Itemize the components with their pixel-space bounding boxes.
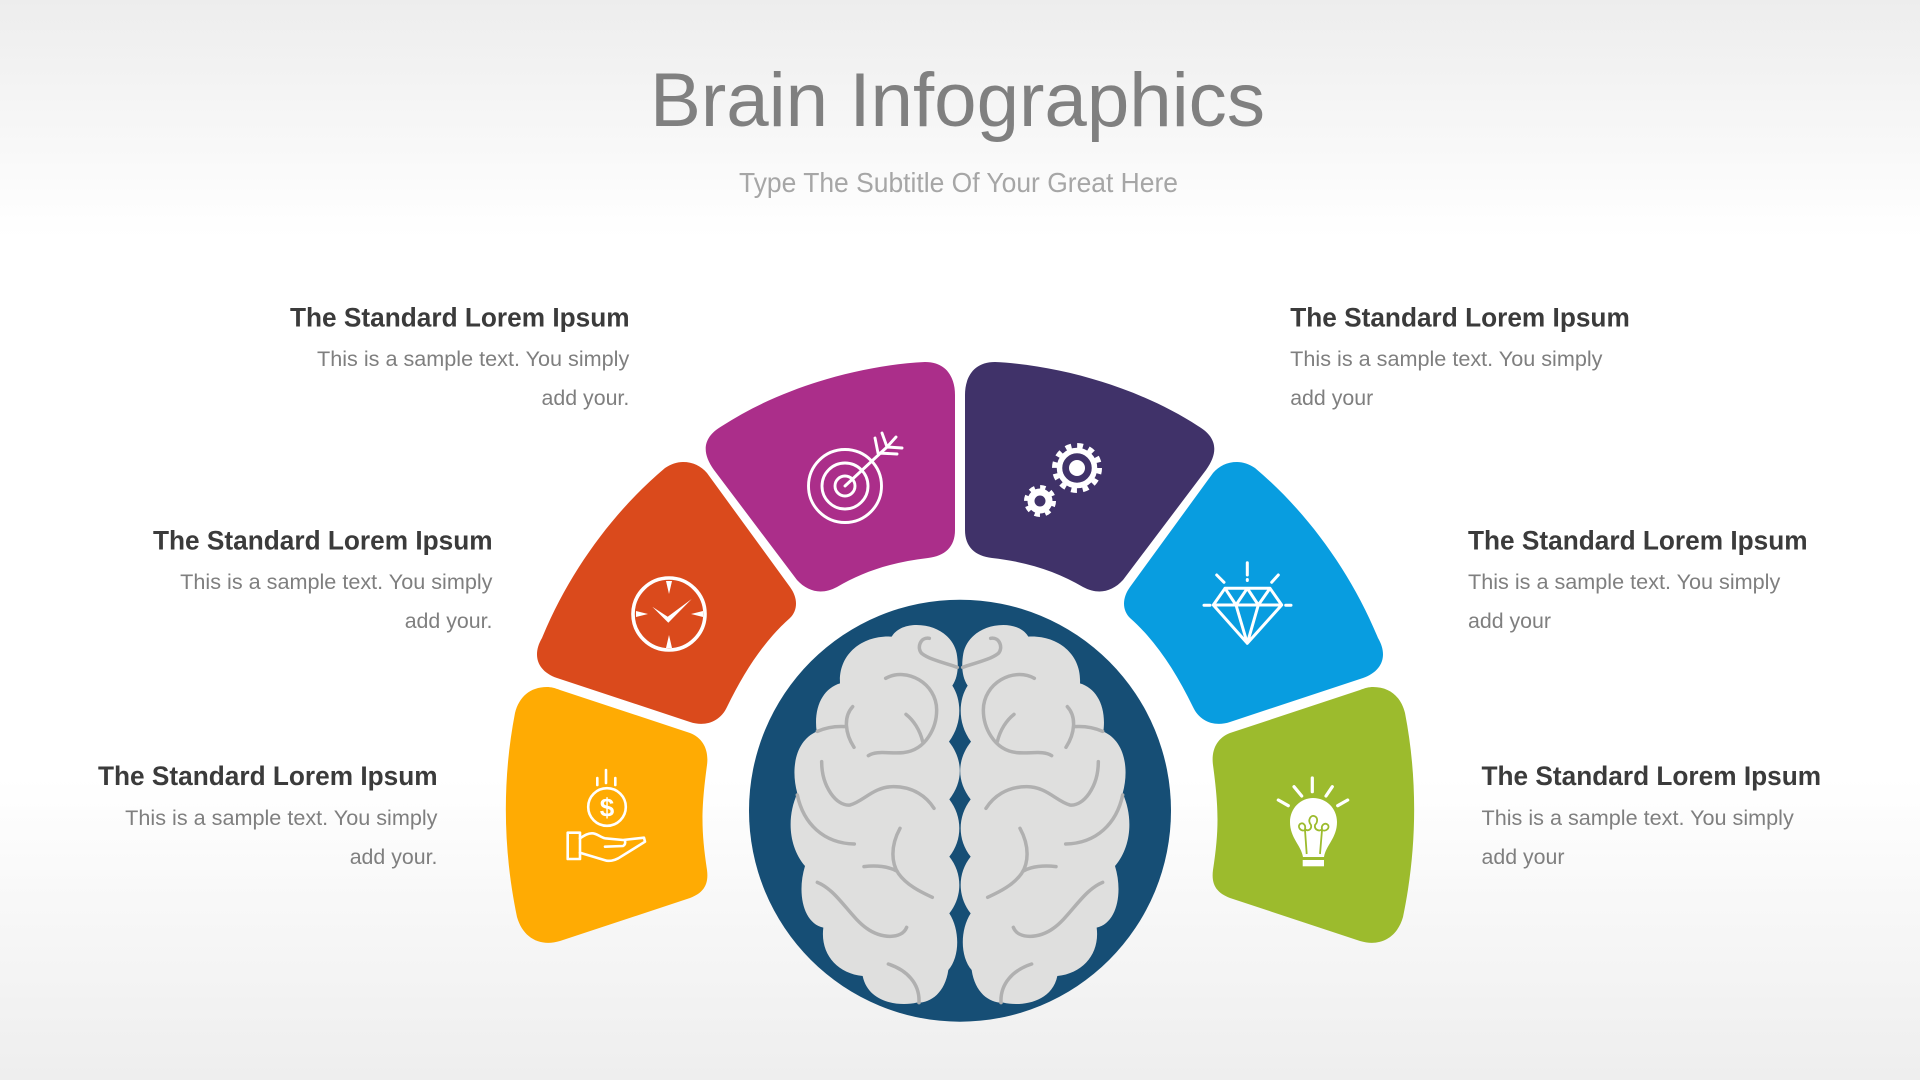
text block: top right: The Standard Lorem Ipsum — [1290, 303, 1630, 333]
title: Brain Infographics — [650, 58, 1265, 143]
panel: purple segment — [965, 362, 1214, 591]
text block: top left: This is a sample text. You simply — [317, 347, 630, 371]
text block: middle left: The Standard Lorem Ipsum — [153, 526, 493, 556]
text block: middle right: add your — [1468, 609, 1551, 633]
icon: gears — [1026, 446, 1100, 515]
text block: middle left — [153, 526, 493, 633]
text block: bottom right: The Standard Lorem Ipsum — [1482, 761, 1821, 791]
panel: green segment — [1213, 687, 1414, 943]
brain circle background — [749, 600, 1171, 1022]
text block: top left: The Standard Lorem Ipsum — [290, 303, 630, 333]
panel: magenta segment — [706, 362, 955, 591]
text block: middle left: add your. — [405, 609, 492, 633]
text block: bottom left: add your. — [350, 845, 438, 869]
text block: top right — [1290, 303, 1630, 410]
brain: left hemisphere — [791, 625, 960, 1004]
icon: coin and hand — [568, 770, 645, 861]
icon: clock — [633, 578, 705, 650]
icon: diamond — [1204, 563, 1291, 643]
brain: right hemisphere — [960, 625, 1129, 1004]
text block: bottom left: The Standard Lorem Ipsum — [98, 761, 438, 791]
text block: bottom right: add your — [1482, 845, 1564, 869]
text block: bottom right — [1482, 761, 1821, 869]
text block: middle left: This is a sample text. You simply — [180, 570, 493, 594]
text block: bottom left: This is a sample text. You simply — [125, 806, 438, 830]
text block: top right: This is a sample text. You simply — [1290, 347, 1603, 371]
icon: coin and hand: $ — [600, 792, 615, 822]
text block: bottom left — [98, 761, 438, 869]
text block: middle right — [1468, 526, 1808, 633]
panel: orange segment — [537, 462, 796, 724]
icon: target with arrow — [808, 433, 902, 522]
text block: top left — [290, 303, 630, 410]
text block: bottom right: This is a sample text. You simply — [1482, 806, 1794, 830]
panel: yellow segment — [506, 687, 707, 943]
panel: blue segment — [1124, 462, 1383, 724]
text block: middle right: The Standard Lorem Ipsum — [1468, 526, 1808, 556]
text block: top right: add your — [1290, 386, 1373, 410]
icon: light bulb — [1278, 778, 1348, 866]
text block: top left: add your. — [542, 386, 629, 410]
text block: middle right: This is a sample text. You simply — [1468, 570, 1781, 594]
subtitle: Type The Subtitle Of Your Great Here — [739, 167, 1178, 198]
